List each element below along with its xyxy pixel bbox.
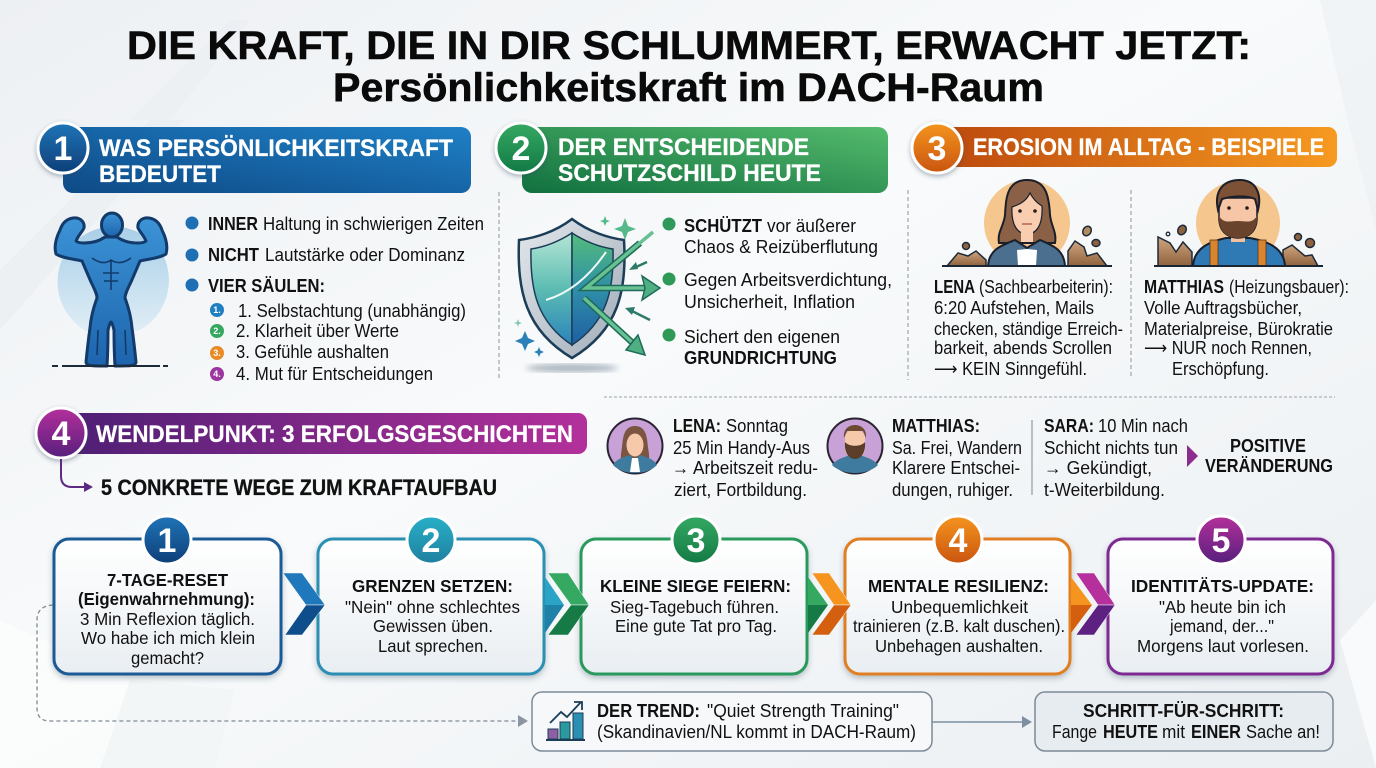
text: Matthias: Erschöpfung. (1172, 359, 1269, 379)
card 5: Identitäts-Update: IDENTITÄTS-UPDATE: (1131, 576, 1314, 596)
card 2: Grenzen setzen: Laut sprechen. (378, 636, 488, 656)
title: DIE KRAFT, DIE IN DIR SCHLUMMERT, ERWACHT JETZT: (127, 24, 1251, 68)
avatar: Matthias (828, 418, 882, 474)
heading 1: BEDEUTET (99, 161, 221, 188)
bullet list (662, 216, 892, 368)
callout: Schritt-für-Schritt: SCHRITT-FÜR-SCHRITT: (1083, 701, 1284, 721)
text: Matthias: Materialpreise, Bürokratie (1144, 319, 1333, 339)
text: Lena: barkeit, abends Scrollen (934, 338, 1112, 358)
panel: Was Persönlichkeitskraft bedeutet (38, 123, 484, 384)
story: Matthias: Klarere Entschei- (892, 458, 1020, 478)
story: Matthias: MATTHIAS: (892, 416, 980, 436)
arrow: trend to call to action (932, 716, 1032, 728)
heading 4: 4 (52, 415, 71, 453)
heading 1: 1 (54, 130, 72, 168)
card 5: Identitäts-Update: Morgens laut vorlesen. (1137, 636, 1309, 656)
chevrons between cards (283, 573, 1115, 635)
heading 2: DER ENTSCHEIDENDE (558, 134, 809, 161)
arrow: dashed feedback path (37, 605, 528, 727)
card 4: Mentale Resilienz: Unbequemlichkeit (891, 597, 1028, 617)
bullet list: SCHÜTZT (684, 216, 762, 236)
text: Lena (934, 277, 1123, 379)
callout: Der Trend (532, 692, 932, 751)
panel: Wendelpunkt (36, 408, 1333, 500)
heading 2: 2 (512, 130, 530, 168)
portrait: Lena (942, 180, 1112, 266)
card 3: Kleine Siege feiern: Eine gute Tat pro Tag. (615, 616, 777, 636)
text: Matthias: (Heizungsbauer): (1229, 277, 1349, 297)
text: Lena: (Sachbearbeiterin): (979, 277, 1113, 297)
card 2: Grenzen setzen: 2 (422, 522, 440, 560)
card 1: 7-Tage-Reset: 7-TAGE-RESET (107, 570, 228, 590)
arrow: connector to subheading (61, 459, 93, 492)
card 3: Kleine Siege feiern (581, 516, 807, 674)
card 2: Grenzen setzen (318, 516, 544, 674)
bullet list: 4. (213, 369, 221, 379)
callout: Schritt-für-Schritt: Fange (1052, 722, 1097, 742)
story: Matthias (892, 416, 1022, 500)
text: Lena: checken, ständige Erreich- (934, 319, 1123, 339)
title: Persönlichkeitskraft im DACH-Raum (333, 66, 1044, 110)
story: Sara: t-Weiterbildung. (1044, 480, 1165, 500)
bullet list: 4. Mut für Entscheidungen (236, 364, 433, 384)
portrait: Matthias (1154, 180, 1323, 266)
heading 3 (912, 123, 1337, 173)
heading 1: WAS PERSÖNLICHKEITSKRAFT (99, 135, 453, 162)
bullet list: Chaos & Reizüberflutung (684, 237, 878, 257)
card 3: Kleine Siege feiern: KLEINE SIEGE FEIERN: (600, 576, 791, 596)
story: Sara: → Gekündigt, (1044, 458, 1152, 478)
bullet list (186, 214, 484, 384)
story: Lena: 25 Min Handy-Aus (673, 438, 810, 458)
bullet list: Lautstärke oder Dominanz (265, 245, 465, 265)
story: Lena: Sonntag (726, 416, 788, 436)
heading 1 (38, 123, 471, 193)
card 1: 7-Tage-Reset: 3 Min Reflexion täglich. (80, 609, 255, 629)
bullet list: INNER (208, 214, 258, 234)
bullet list: 1. (213, 305, 221, 315)
bullet list: VIER SÄULEN: (208, 276, 325, 296)
bullet list: NICHT (208, 245, 259, 265)
card 2: Grenzen setzen: "Nein" ohne schlechtes (345, 597, 520, 617)
text: Lena: 6:20 Aufstehen, Mails (934, 298, 1094, 318)
icon: shield with deflected arrows (514, 216, 660, 372)
card 1: 7-Tage-Reset: gemacht? (131, 648, 204, 668)
bullet list: GRUNDRICHTUNG (684, 348, 837, 368)
card 5: Identitäts-Update: 5 (1212, 522, 1230, 560)
text: Matthias: ⟶ NUR noch Rennen, (1144, 338, 1312, 358)
label: positive Veränderung: POSITIVE (1230, 436, 1306, 456)
card 4: Mentale Resilienz: 4 (949, 522, 968, 560)
arrow: to positive change (1187, 445, 1198, 467)
heading 3: EROSION IM ALLTAG - BEISPIELE (973, 134, 1324, 161)
card 3: Kleine Siege feiern: 3 (687, 522, 705, 560)
bullet list: 2. Klarheit über Werte (236, 321, 399, 341)
callout: Schritt-für-Schritt: EINER (1191, 722, 1241, 742)
text: Lena: ⟶ KEIN Sinngefühl. (934, 359, 1087, 379)
card 5: Identitäts-Update (1108, 516, 1333, 674)
card 2: Grenzen setzen: GRENZEN SETZEN: (352, 576, 513, 596)
story: Lena: ziert, Fortbildung. (674, 480, 807, 500)
card 4: Mentale Resilienz: Unbehagen aushalten. (875, 636, 1043, 656)
card 4: Mentale Resilienz (845, 516, 1070, 674)
bullet list: 1. Selbstachtung (unabhängig) (238, 301, 466, 321)
callout: Schritt-für-Schritt: mit (1162, 722, 1185, 742)
card 1: 7-Tage-Reset (54, 516, 281, 674)
card 1: 7-Tage-Reset: (Eigenwahrnehmung): (78, 589, 255, 609)
text: Matthias: MATTHIAS (1144, 277, 1224, 297)
story: Lena: → Arbeitszeit redu- (672, 458, 818, 478)
panel: Der entscheidende Schutzschild heute (496, 123, 892, 372)
story: Lena (672, 416, 818, 500)
story: Matthias: Sa. Frei, Wandern (892, 438, 1022, 458)
story: Sara: 10 Min nach (1098, 416, 1188, 436)
callout: Schritt-für-Schritt: HEUTE (1103, 722, 1158, 742)
icon: rising bar chart (546, 702, 585, 740)
callout: Der Trend: "Quiet Strength Training" (707, 701, 899, 721)
bullet list: 2. (213, 326, 221, 336)
subheading: 5 CONKRETE WEGE ZUM KRAFTAUFBAU (101, 475, 497, 500)
label: positive Veränderung (1205, 436, 1333, 476)
story: Matthias: dungen, ruhiger. (892, 480, 1013, 500)
card 4: Mentale Resilienz: trainieren (z.B. kalt duschen). (853, 616, 1065, 636)
bullet list: vor äußerer (767, 216, 856, 236)
card 3: Kleine Siege feiern: Sieg-Tagebuch führen. (610, 597, 779, 617)
heading 2 (496, 123, 888, 193)
story: Lena: LENA: (673, 416, 721, 436)
card 5: Identitäts-Update: jemand, der..." (1169, 616, 1274, 636)
bullet list: Haltung in schwierigen Zeiten (263, 214, 484, 234)
card 1: 7-Tage-Reset: Wo habe ich mich klein (81, 628, 255, 648)
bullet list: 3. (213, 348, 221, 358)
avatar: Lena (608, 418, 662, 474)
card 5: Identitäts-Update: "Ab heute bin ich (1159, 597, 1286, 617)
icon: muscular figure (52, 213, 169, 366)
text: Lena: LENA (934, 277, 975, 297)
text: Matthias: Volle Auftragsbücher, (1144, 298, 1302, 318)
bullet list: Unsicherheit, Inflation (684, 292, 855, 312)
panel: Erosion im Alltag (912, 123, 1349, 379)
heading 2: SCHUTZSCHILD HEUTE (558, 160, 821, 187)
text: Matthias (1144, 277, 1349, 379)
bullet list: Gegen Arbeitsverdichtung, (684, 270, 892, 290)
story: Sara (1044, 416, 1188, 500)
heading 4 (36, 408, 587, 458)
heading 3: 3 (928, 130, 946, 168)
title (127, 24, 1251, 110)
callout: Der Trend: (Skandinavien/NL kommt in DACH-Raum) (597, 722, 916, 742)
card 4: Mentale Resilienz: MENTALE RESILIENZ: (868, 576, 1049, 596)
heading 4: WENDELPUNKT: 3 ERFOLGSGESCHICHTEN (96, 421, 573, 448)
bullet list: 3. Gefühle aushalten (236, 342, 389, 362)
bullet list: Sichert den eigenen (684, 327, 840, 347)
callout: Der Trend: DER TREND: (597, 701, 700, 721)
label: positive Veränderung: VERÄNDERUNG (1205, 456, 1333, 476)
story: Sara: SARA: (1044, 416, 1094, 436)
card 1: 7-Tage-Reset: 1 (158, 522, 176, 560)
card 2: Grenzen setzen: Gewissen üben. (373, 616, 493, 636)
callout: Schritt-für-Schritt (1035, 692, 1333, 751)
callout: Schritt-für-Schritt: Sache an! (1246, 722, 1320, 742)
story: Sara: Schicht nichts tun (1044, 438, 1178, 458)
